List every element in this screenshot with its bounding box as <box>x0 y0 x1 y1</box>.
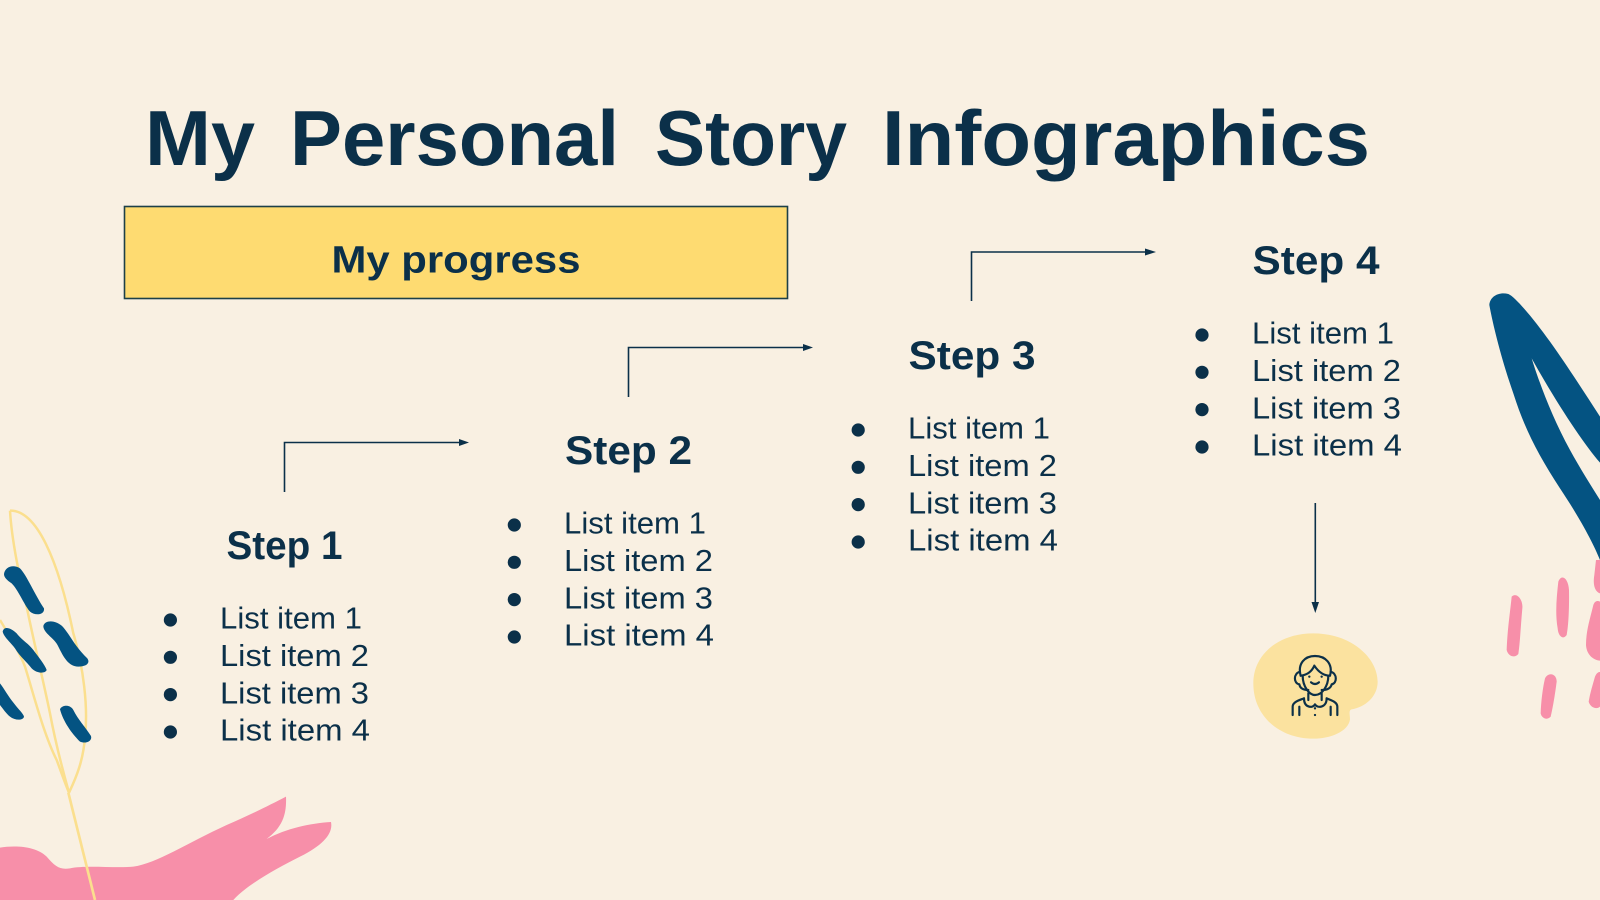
title: My <box>145 94 255 182</box>
step 1 list: List item 4 <box>220 713 370 748</box>
title: Story <box>655 94 847 182</box>
step 2 heading: Step 2 <box>565 429 692 473</box>
title <box>145 94 1370 182</box>
decoration: pink brush dashes right <box>1507 560 1600 719</box>
arrow: step 3 to step 4 <box>972 248 1156 301</box>
step 3 list <box>852 411 1058 558</box>
step 4 heading: Step 4 <box>1252 239 1380 283</box>
decoration: pink hand shape bottom left <box>0 797 331 900</box>
decoration: blue brush loop right <box>1489 293 1600 560</box>
title: Infographics <box>882 94 1370 182</box>
title: Personal <box>290 94 619 182</box>
arrow: step 1 to step 2 <box>284 439 469 492</box>
step 3 <box>852 334 1058 558</box>
step 3 list: List item 1 <box>908 411 1050 446</box>
step 2 list: List item 4 <box>564 618 714 653</box>
arrow: step 4 down to person <box>1312 503 1319 613</box>
step 1 <box>164 524 370 748</box>
panel: My progress banner: My progress <box>332 240 580 282</box>
step 1 list: List item 1 <box>220 601 362 636</box>
step 2 <box>508 429 714 653</box>
icon: person on yellow blob <box>1253 633 1378 739</box>
step 4 <box>1195 239 1402 463</box>
step 1 list: List item 2 <box>220 638 369 673</box>
step 2 list <box>508 506 714 653</box>
step 1 list <box>164 601 370 748</box>
arrow: step 2 to step 3 <box>628 344 813 397</box>
step 3 list: List item 4 <box>908 523 1058 558</box>
step 4 list: List item 1 <box>1252 316 1394 351</box>
step 3 list: List item 2 <box>908 448 1057 483</box>
step 4 list <box>1195 316 1402 463</box>
step 3 heading: Step 3 <box>908 334 1036 378</box>
step 1 list: List item 3 <box>220 676 369 711</box>
step 2 list: List item 2 <box>564 543 713 578</box>
step 4 list: List item 4 <box>1252 428 1402 463</box>
step 4 list: List item 2 <box>1252 353 1401 388</box>
step 3 list: List item 3 <box>908 486 1057 521</box>
step 2 list: List item 3 <box>564 581 713 616</box>
step 2 list: List item 1 <box>564 506 706 541</box>
decoration: blue brush dashes left <box>0 566 91 743</box>
decoration: yellow leaf outline <box>0 511 95 900</box>
step 4 list: List item 3 <box>1252 391 1401 426</box>
panel: My progress banner <box>124 206 788 298</box>
step 1 heading: Step 1 <box>226 524 342 568</box>
